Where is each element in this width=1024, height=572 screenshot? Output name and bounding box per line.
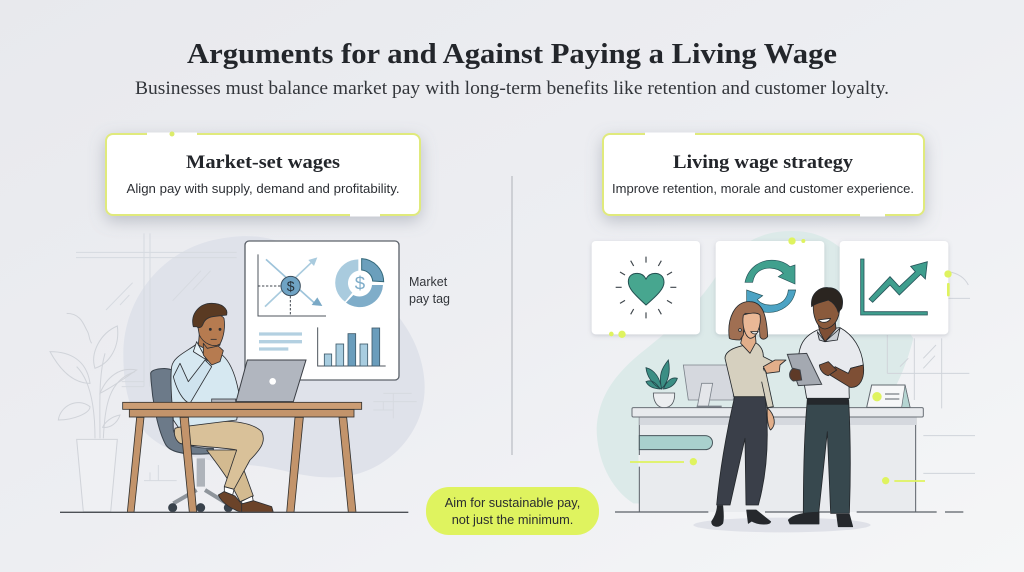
text: living wage description: Improve retention, morale and customer experience. — [612, 182, 914, 196]
person: woman pointing — [712, 302, 786, 526]
person: man with tablet — [788, 288, 864, 527]
callout pill — [426, 487, 599, 535]
icon: potted plant — [50, 313, 137, 512]
chair — [151, 369, 232, 512]
desk — [123, 402, 362, 512]
background window lines — [887, 272, 975, 473]
callout pill: Aim for sustainable pay, — [445, 495, 580, 510]
window frame — [76, 233, 417, 481]
card: growth chart — [840, 241, 948, 334]
card: heart — [592, 241, 700, 334]
chart: supply and demand: $ — [287, 278, 295, 294]
background blob — [597, 231, 913, 512]
chart: bars — [318, 327, 386, 366]
illustration: living wage team — [592, 231, 975, 532]
subtitle: Businesses must balance market pay with long-term benefits like retention and customer loyalty. — [135, 78, 889, 99]
chart: supply and demand — [258, 254, 326, 316]
panel: market data board — [245, 241, 399, 380]
desk name sign — [867, 385, 910, 407]
text: market-set description: Align pay with supply, demand and profitability. — [126, 182, 400, 196]
chart: donut: $ — [355, 272, 366, 293]
label: market pay tag: pay tag — [409, 292, 450, 306]
callout pill: not just the minimum. — [452, 512, 573, 527]
heading: market-set wages: Market-set wages — [186, 152, 340, 173]
icon: growth chart — [861, 259, 927, 315]
illustration: analyst at desk — [50, 233, 425, 512]
icon: desk plant — [646, 360, 677, 408]
panel: market-set wages header card — [106, 132, 420, 215]
reception desk — [630, 408, 925, 512]
card: retention cycle — [716, 241, 824, 334]
icon: cycle arrows — [745, 260, 796, 312]
icon: heart — [616, 257, 676, 318]
floor line — [60, 510, 408, 514]
background blob — [123, 236, 425, 477]
monitor — [683, 365, 733, 407]
tablet — [787, 353, 822, 386]
chart: donut — [335, 259, 384, 307]
heading: living wage strategy: Living wage strategy — [673, 152, 854, 173]
label: market pay tag: Market — [409, 275, 448, 289]
panel: living wage header card — [603, 134, 924, 215]
divider — [511, 176, 513, 455]
floor — [615, 512, 963, 532]
accent dots — [609, 237, 952, 338]
title: Arguments for and Against Paying a Living Wage — [187, 38, 837, 70]
person: thinking man — [171, 303, 273, 512]
text lines placeholder — [259, 334, 302, 349]
laptop — [212, 360, 306, 402]
